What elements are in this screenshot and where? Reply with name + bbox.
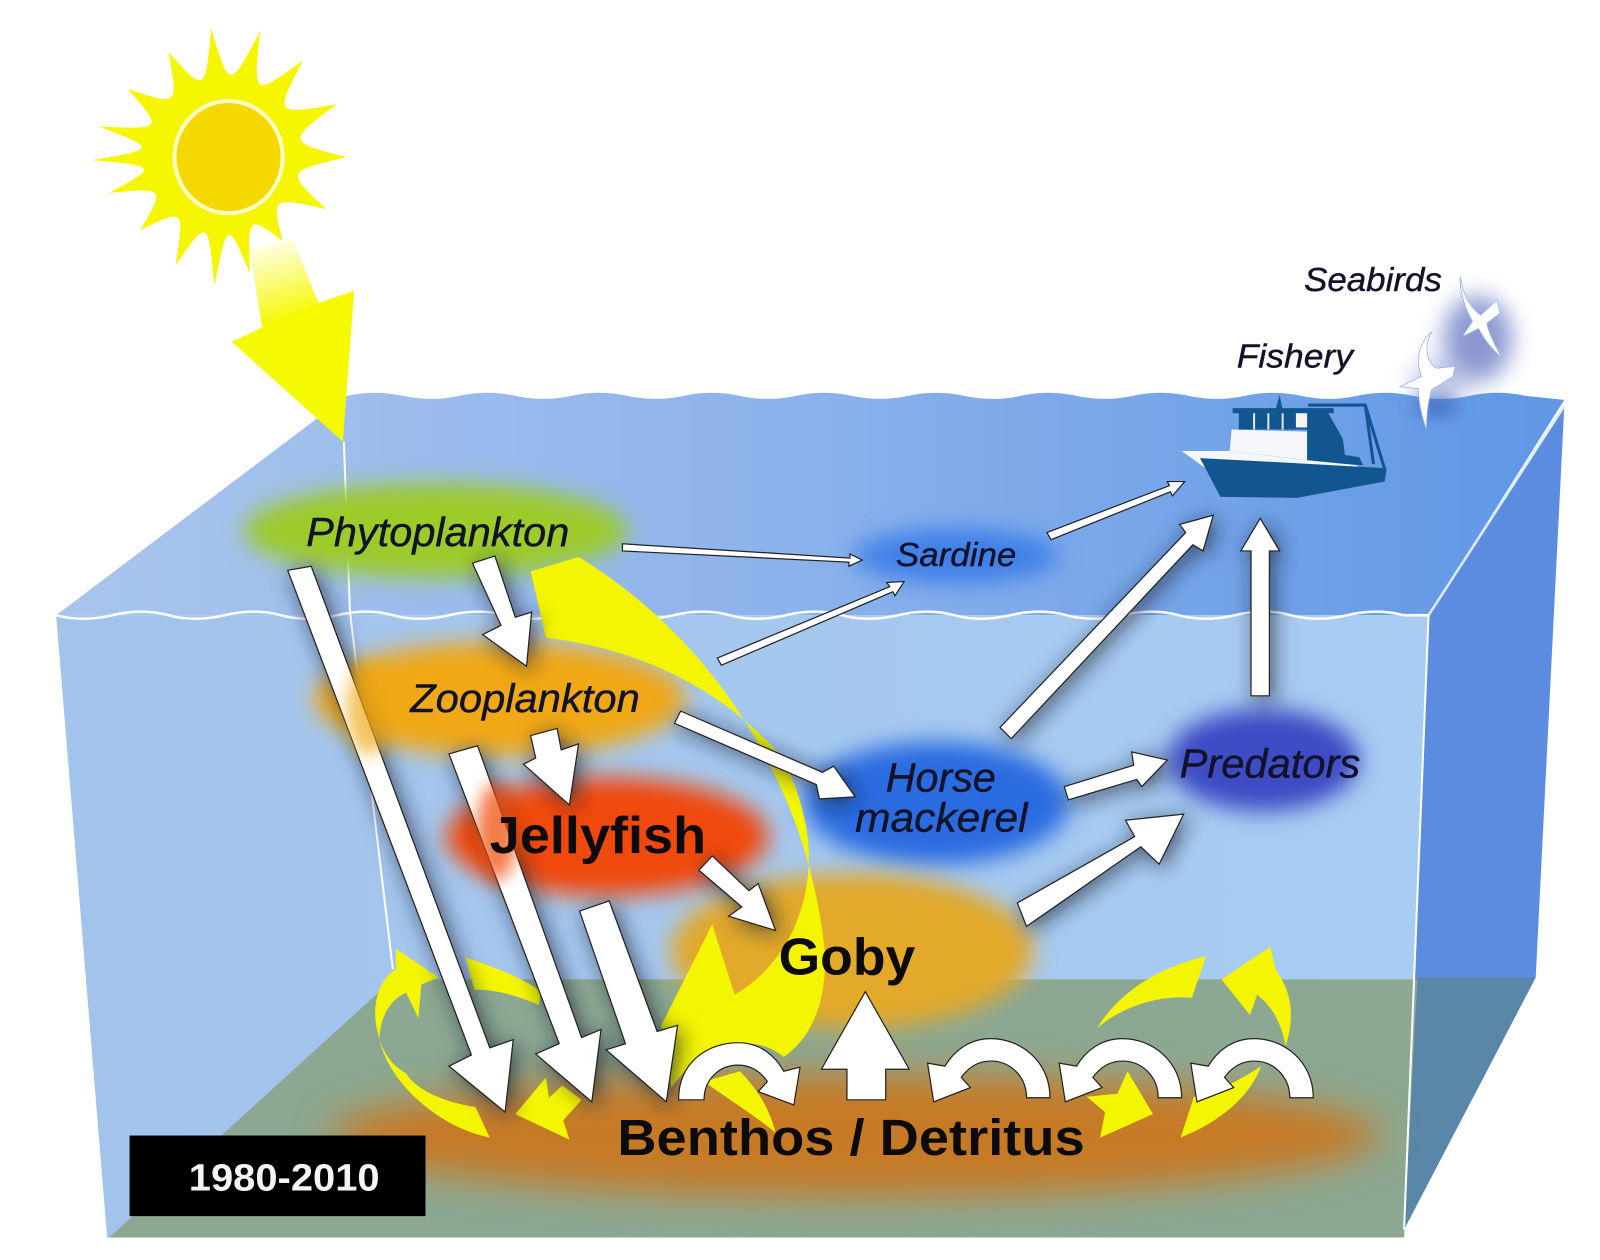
label: Zooplankton: Zooplankton (409, 677, 640, 721)
arrow: zooplankton to horse mackerel (674, 711, 855, 799)
label: Sardine: Sardine (896, 537, 1016, 574)
sea floor (109, 979, 1417, 1238)
arrow: horse mackerel to predators (1064, 752, 1167, 800)
label: Benthos / Detritus: Benthos / Detritus (617, 1109, 1085, 1166)
arrow: benthos up to goby (821, 992, 909, 1100)
blob: goby (670, 873, 1034, 1028)
arrow: jellyfish to goby (699, 856, 776, 930)
blob: zooplankton (314, 642, 686, 756)
yellow arrows: right recycling (1087, 947, 1291, 1138)
label: Phytoplankton: Phytoplankton (306, 509, 569, 555)
arrow: zooplankton to jellyfish (523, 728, 579, 805)
icon: seabird upper (1460, 276, 1502, 358)
arrow tint where jellyfish overlaps (477, 783, 517, 880)
curved arrow: benthos recycling two (1059, 1039, 1182, 1102)
label: Seabirds: Seabirds (1304, 262, 1442, 299)
arrow: horse mackerel to fishery (1000, 515, 1213, 739)
arrow: predators to fishery (1241, 518, 1280, 696)
period badge: 1980-2010 (189, 1157, 380, 1199)
front and back edge lines (56, 442, 1429, 1229)
blob: phytoplankton (244, 484, 628, 577)
label: Predators: Predators (1180, 740, 1360, 786)
arrow: phytoplankton to detritus (288, 566, 513, 1112)
label: Fishery: Fishery (1237, 338, 1355, 375)
arrow: sunlight into water (232, 240, 354, 442)
period badge (130, 1136, 426, 1216)
box right side (1404, 406, 1564, 1229)
blob: horse mackerel (804, 742, 1069, 864)
thin arrow: sardine to fishery (1047, 482, 1185, 540)
arrow: zooplankton to detritus (449, 746, 601, 1102)
label: Horse mackerel: Horse (886, 755, 996, 801)
curved arrow: clockwise near goby (679, 1043, 800, 1105)
thin arrow: phytoplankton to sardine (622, 544, 862, 566)
blob: sardine (854, 528, 1058, 584)
arrow: goby to predators (1017, 814, 1184, 926)
yellow wedge under curved arrow (704, 1071, 776, 1132)
blob: jellyfish (446, 777, 768, 896)
label: Goby: Goby (779, 928, 915, 986)
big yellow swoosh: phytoplankton to benthos (531, 557, 825, 1088)
blob: benthos and detritus (330, 1074, 1381, 1197)
thin arrow: zooplankton to sardine (717, 582, 904, 665)
label: Horse mackerel: mackerel (855, 795, 1029, 840)
box front face (56, 615, 1429, 1238)
curved arrow: benthos recycling one (928, 1039, 1050, 1102)
blob: seabird halo (1410, 296, 1512, 418)
arrow tint where zooplankton overlaps (347, 663, 392, 755)
water top surface (56, 393, 1564, 615)
arrow: jellyfish to detritus (580, 901, 678, 1102)
arrow: phytoplankton to zooplankton (472, 556, 532, 666)
icon: fishing boat (1182, 395, 1387, 498)
icon: sun (92, 29, 347, 286)
curved arrow: benthos recycling three (1191, 1039, 1313, 1102)
blob: predators (1167, 709, 1359, 811)
icon: seabird lower (1400, 332, 1455, 430)
label: Horse mackerel (855, 755, 1029, 840)
label: Jellyfish: Jellyfish (490, 807, 706, 865)
yellow arrows: left recycling (375, 949, 582, 1140)
